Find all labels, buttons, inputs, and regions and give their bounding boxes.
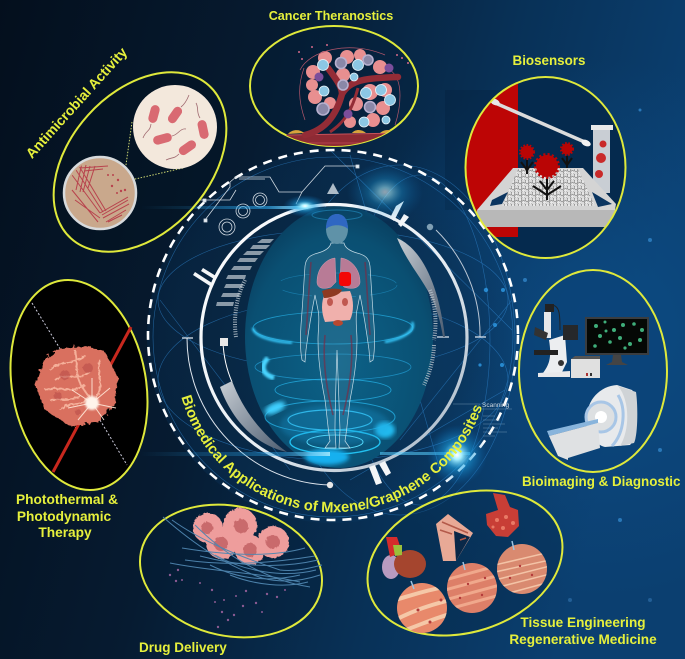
microscope — [534, 304, 578, 377]
panel: tissue engineering — [366, 490, 564, 636]
central hud disc — [147, 150, 519, 523]
dashed outer ring — [148, 150, 518, 520]
dotted zoom lines — [125, 122, 183, 180]
bladder — [333, 320, 343, 326]
burst — [68, 378, 116, 420]
stomach and intestine — [486, 493, 519, 537]
circular title: Biomedical Applications of Mxene/Graphene Composites — [182, 394, 482, 512]
kidneys — [327, 298, 348, 306]
test tube — [591, 125, 613, 193]
hologram rings — [253, 210, 413, 454]
liver — [322, 289, 342, 298]
stomach tissue — [497, 544, 547, 594]
label: biosensors: Biosensors — [513, 53, 585, 68]
human body — [300, 214, 375, 448]
tumor cell — [35, 346, 118, 426]
circuit lines and rings — [200, 165, 359, 235]
heart tissue — [395, 583, 450, 633]
hud T markers — [193, 201, 409, 485]
head — [326, 214, 348, 244]
label: photothermal: Therapy — [38, 525, 92, 540]
magnified bacteria — [133, 85, 217, 169]
label: antimicrobial: Antimicrobial Activity — [22, 44, 130, 161]
red backdrop — [466, 84, 518, 237]
panel: photothermal and photodynamic therapy — [0, 269, 163, 501]
heart — [339, 272, 351, 286]
label: photothermal: Photodynamic — [17, 509, 112, 524]
dotted axis — [32, 303, 127, 465]
label: photothermal: Photothermal & — [16, 492, 118, 507]
pink cells — [193, 508, 289, 565]
muscle tissue — [445, 563, 500, 613]
swab — [489, 97, 592, 148]
body outline — [300, 243, 375, 448]
label: bioimaging: Bioimaging & Diagnostic — [522, 474, 681, 489]
blue fibers — [163, 517, 322, 587]
control box — [571, 356, 600, 378]
panel: biosensors — [460, 77, 626, 258]
hologram glow spots — [263, 399, 395, 465]
label: tissue engineering: Tissue Engineering — [520, 615, 646, 630]
hud wedges — [220, 183, 445, 488]
panel: bioimaging and diagnostic — [519, 270, 667, 472]
monitor — [585, 317, 649, 365]
lungs — [317, 258, 360, 288]
petri dish — [64, 157, 136, 229]
panel: drug delivery — [127, 488, 335, 654]
tumor cells and vessel — [286, 44, 409, 146]
scanning label: Scanning — [482, 402, 509, 409]
red laser beam — [53, 327, 131, 472]
heart — [382, 537, 426, 579]
viruses and antibodies — [520, 144, 572, 200]
tissue arrows — [411, 541, 514, 589]
mri scanner — [547, 385, 637, 460]
muscle — [436, 514, 473, 561]
drug particles — [169, 569, 286, 628]
label: cancer theranostics: Cancer Theranostics — [269, 9, 393, 23]
inner white ring — [182, 204, 486, 485]
blood vessels — [306, 262, 370, 415]
abdomen organs — [322, 291, 353, 322]
hud stacked bars — [216, 239, 274, 306]
plate — [477, 168, 617, 227]
label: tissue engineering: Regenerative Medicine — [509, 632, 657, 647]
hud tick arcs — [235, 280, 436, 385]
scanning label — [453, 402, 512, 436]
vessel and trunk — [286, 132, 387, 146]
panel: antimicrobial activity — [52, 71, 228, 253]
label: drug delivery: Drug Delivery — [139, 640, 227, 655]
panel: cancer theranostics — [250, 26, 420, 150]
light streaks — [140, 162, 487, 485]
human body core glow — [245, 206, 433, 468]
